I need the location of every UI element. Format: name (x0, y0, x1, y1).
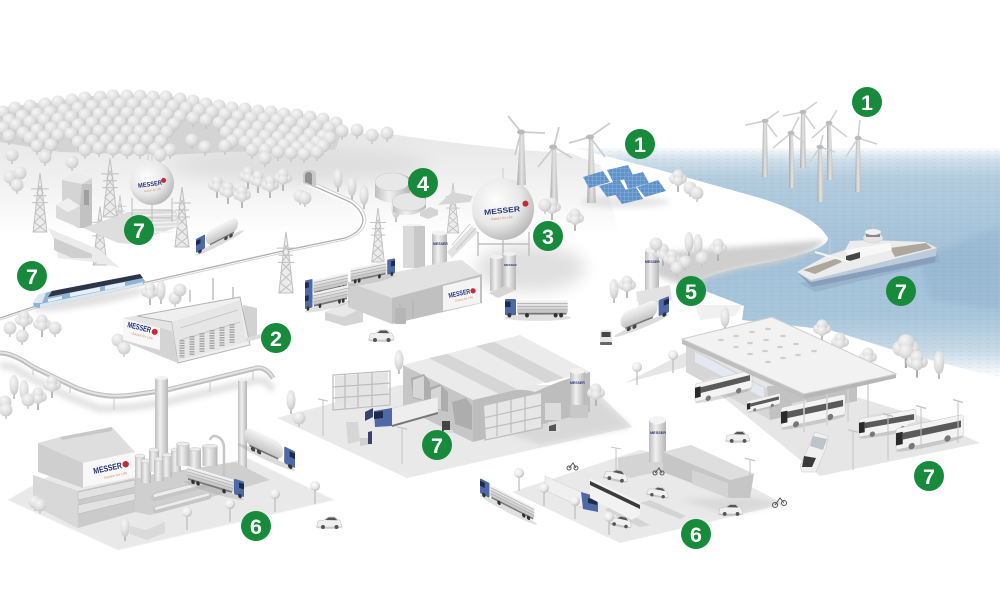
fuel station (605, 416, 784, 527)
tube trailer trucks at hall (305, 258, 395, 315)
pipeline (0, 352, 273, 410)
fuel station: MESSER (650, 431, 666, 435)
train (32, 274, 148, 316)
biogas domes (375, 173, 473, 219)
large spherical tank with logo: Gases for Life (491, 215, 513, 221)
badge 7 ferry: 7 (895, 280, 907, 304)
substation building with logo: Gases for Life (131, 331, 153, 341)
badge 3 storage (533, 221, 563, 251)
box truck and forklifts at factory (318, 397, 560, 464)
large spherical tank with logo (447, 168, 548, 265)
large spherical tank with logo: MESSER (484, 204, 521, 217)
offshore wind turbines (745, 102, 877, 202)
badge 7 bus depot: 7 (923, 465, 935, 489)
badge 7 bus depot (914, 461, 944, 491)
spherical tank left with logo (130, 153, 174, 222)
badge 5 fuelling point (676, 276, 706, 306)
badge 1 onshore renewables: 1 (634, 133, 646, 157)
wind turbines on land (508, 116, 610, 203)
tree group: middle clearing (208, 166, 400, 222)
badge 7 ferry (886, 276, 916, 306)
badge 7 power block: 7 (133, 219, 145, 243)
badge 7 power block (124, 215, 154, 245)
badge 2 substation (261, 323, 291, 353)
hydrogen hall with logo: MESSER (448, 289, 471, 300)
badge 6 plant: 6 (250, 515, 262, 539)
fuel station vehicles (514, 463, 786, 535)
badge 5 fuelling point: 5 (685, 280, 697, 304)
bus depot forecourt (625, 345, 980, 476)
hydrogen hall with logo (325, 260, 482, 326)
tanker truck upper left (196, 213, 244, 258)
trees lower left (0, 375, 61, 419)
hydrogen production plant with logo: MESSER (92, 460, 123, 476)
car near hall (368, 330, 394, 342)
fuelling point tank and trees at shore (610, 232, 727, 312)
factory hall: MESSER (570, 381, 585, 385)
factory forecourt (277, 385, 632, 478)
hydrogen production plant with logo (28, 376, 270, 541)
scene illustration (0, 90, 1000, 550)
badge 7 train (17, 261, 47, 291)
power block building (48, 173, 120, 268)
badge 2 substation: 2 (270, 327, 282, 351)
rail line with tunnel (0, 170, 366, 320)
hydrogen hall with logo: Gases for Life (454, 295, 474, 303)
fuel station forecourt (512, 450, 784, 543)
badge 4 biogas: 4 (417, 172, 429, 196)
fuelling point tank and trees at shore: MESSER (645, 260, 660, 264)
ferry (797, 222, 940, 292)
bus depot building (632, 317, 896, 432)
badge 7 train: 7 (26, 265, 38, 289)
solar panels (580, 165, 670, 208)
badge 1 onshore renewables (625, 129, 655, 159)
spherical tank left with logo: MESSER (138, 180, 163, 190)
forest (0, 90, 394, 194)
sloped storage ramp (83, 210, 180, 244)
trees and car at plant (182, 481, 342, 530)
car on road (600, 330, 612, 345)
pier and trees at depot shore (695, 305, 944, 379)
badge 1 offshore wind: 1 (861, 91, 873, 115)
badge 6 plant (241, 511, 271, 541)
sea (575, 148, 1000, 378)
land shading (0, 125, 825, 292)
badge 6 fuel station (681, 519, 711, 549)
small tanks by large sphere: MESSER (504, 263, 518, 267)
power pylons (31, 158, 460, 293)
truck with tube trailer near sphere (505, 299, 571, 321)
tube trailer truck at plant (184, 464, 244, 503)
badge 3 storage: 3 (542, 225, 554, 249)
silos behind hydrogen hall (403, 224, 448, 268)
small tanks by large sphere (489, 252, 518, 298)
spherical tank left with logo: Gases for Life (144, 187, 162, 193)
silos behind hydrogen hall: MESSER (433, 242, 448, 246)
tanker truck at plant (237, 422, 295, 474)
trees near sphere and turbines (538, 170, 704, 231)
badge 6 fuel station: 6 (690, 523, 702, 547)
substation building with logo: MESSER (127, 320, 152, 335)
hydrogen production plant with logo: Gases for Life (104, 471, 128, 480)
substation building with logo (123, 278, 265, 363)
badge 7 factory (422, 430, 452, 460)
buses on forecourt (725, 400, 963, 472)
plant forecourt (8, 458, 334, 550)
factory hall (286, 335, 632, 445)
badge 7 factory: 7 (431, 434, 443, 458)
tanker truck at fuelling point (614, 294, 669, 340)
tube trailer truck at station (480, 478, 537, 527)
badge 4 biogas (408, 168, 438, 198)
badge 1 offshore wind (852, 87, 882, 117)
trees near train and substation (4, 280, 186, 357)
